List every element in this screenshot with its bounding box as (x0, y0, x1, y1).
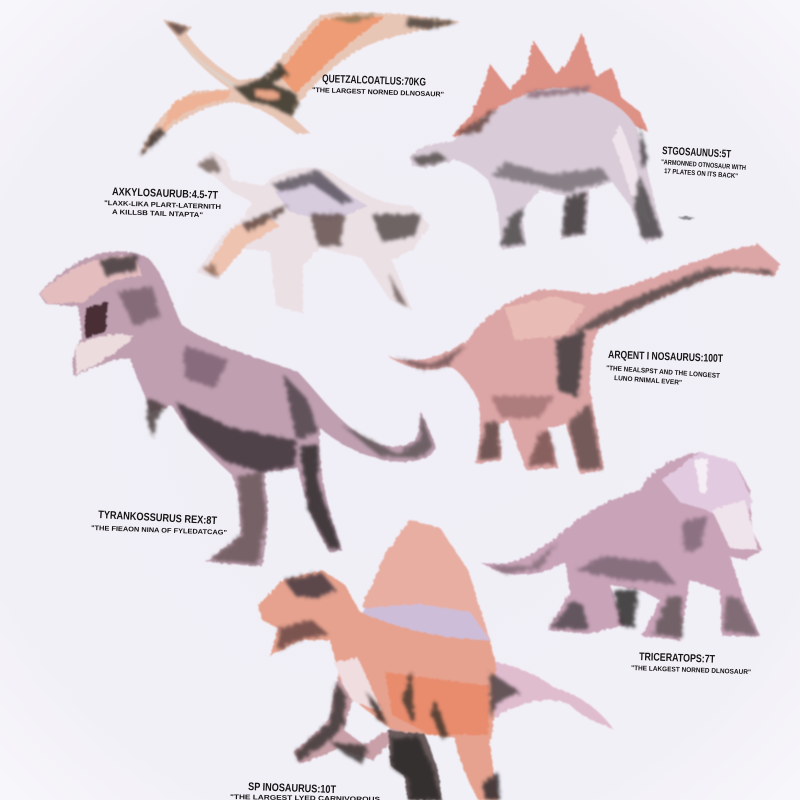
dinosaur: ankylosaurus (195, 151, 430, 313)
label: argentinosaurus: LUNO RNIMAL EVER" (614, 375, 682, 387)
label: triceratops: "THE LAKGEST NORNED DLNOSAUR" (631, 665, 751, 676)
label: spinosaurus (230, 781, 381, 800)
dinosaur: spinosaurus (258, 520, 614, 800)
label: stegosaurus: 17 PLATES ON ITS BACK" (664, 168, 738, 180)
dinosaur: argentinosaurus (388, 244, 780, 474)
label: ankylosaurus: "LAXK-LIKA PLART-LATERNITH (104, 200, 221, 211)
label: quetzalcoatlus (312, 73, 444, 99)
label: argentinosaurus (606, 349, 723, 387)
label: ankylosaurus: AXKYLOSAURUB:4.5-7T (112, 186, 218, 202)
label: stegosaurus: STGOSAUNUS:5T (662, 145, 732, 161)
dinosaur: tyrannosaurus rex (39, 251, 436, 566)
label: stegosaurus: "ARMONNED OTNOSAUR WITH (661, 159, 746, 172)
label: triceratops (631, 651, 751, 676)
label: argentinosaurus: "THE NEALSPST AND THE LONGEST (606, 365, 721, 380)
label: spinosaurus: SP INOSAURUS:10T (248, 781, 336, 796)
label: tyrannosaurus rex (91, 509, 227, 537)
dinosaur: quetzalcoatlus (140, 12, 460, 157)
dinosaur: triceratops (480, 452, 762, 640)
stray ink marks (678, 216, 695, 220)
label: ankylosaurus: A KILLSB TAIL NTAPTA" (112, 209, 203, 219)
label: ankylosaurus (104, 186, 221, 219)
label: quetzalcoatlus: "THE LARGEST NORNED DLNOSAUR" (312, 87, 444, 99)
label: tyrannosaurus rex: TYRANKOSSURUS REX:8T (98, 509, 218, 527)
label: stegosaurus (661, 145, 746, 180)
label: argentinosaurus: ARQENT I NOSAURUS:100T (608, 349, 723, 365)
dinosaur: stegosaurus (410, 33, 695, 250)
label: triceratops: TRICERATOPS:7T (639, 651, 715, 666)
label: quetzalcoatlus: QUETZALCOATLUS:70KG (322, 73, 426, 89)
label: tyrannosaurus rex: "THE FIEAON NINA OF FYLEDATCAG" (91, 525, 227, 537)
